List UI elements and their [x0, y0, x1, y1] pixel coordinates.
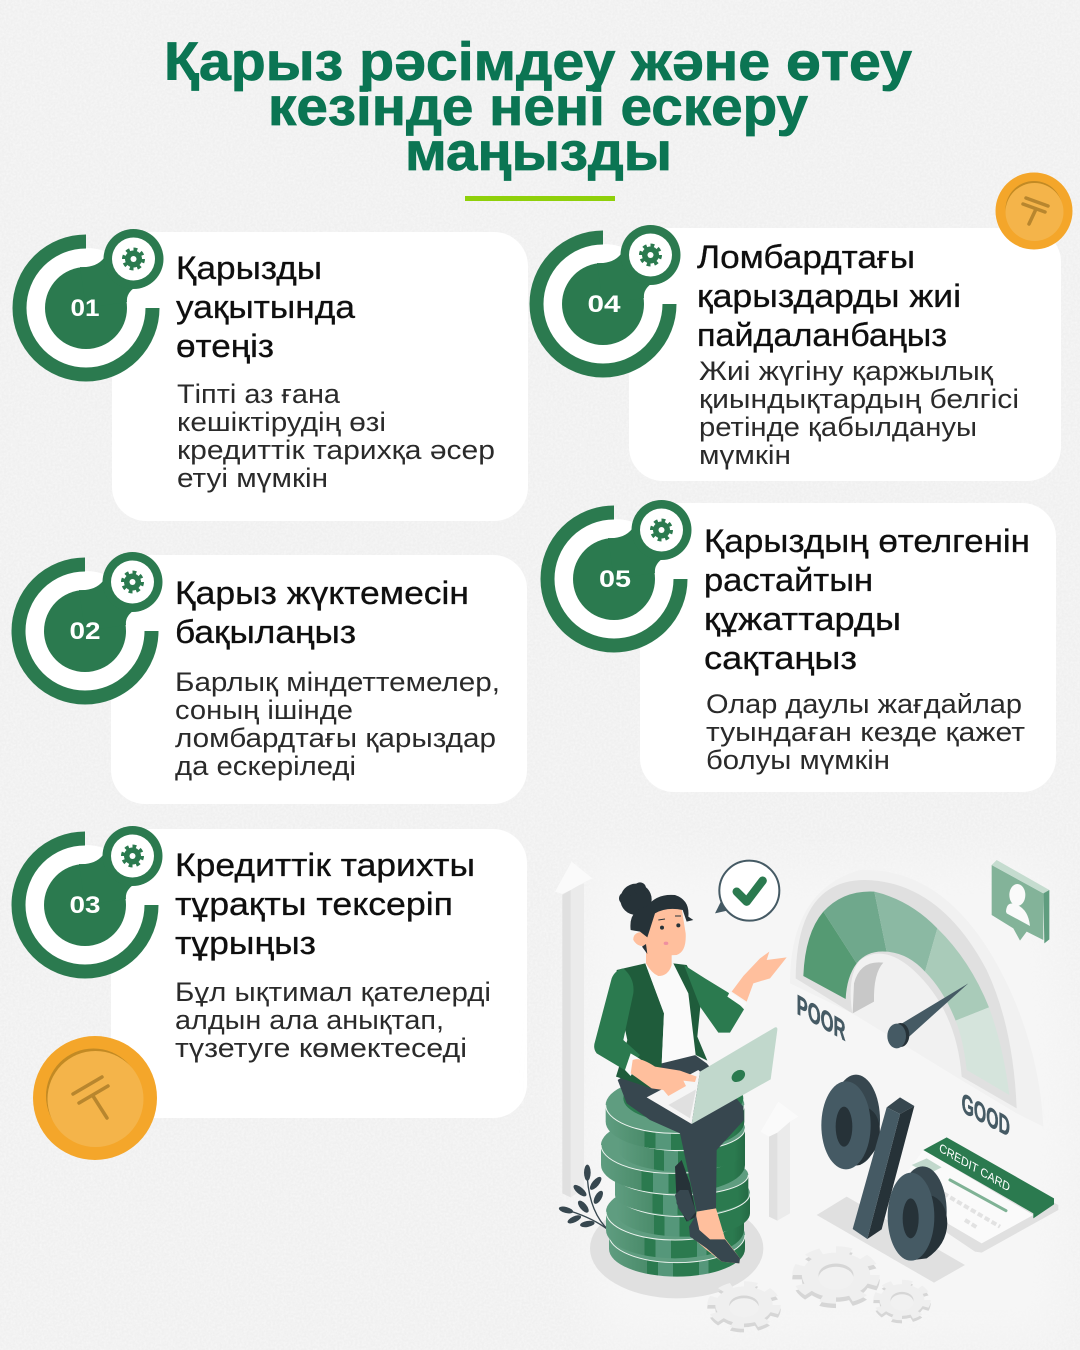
illustration: credit score gauge, percent, card: [790, 860, 1058, 1321]
heading 03: тұрақты тексеріп: [175, 886, 453, 922]
body 03: [175, 977, 491, 1063]
head: [633, 907, 686, 956]
gauge segments: [803, 892, 1009, 1095]
tall arrow: [555, 862, 592, 1197]
body 04: мүмкін: [699, 440, 791, 470]
gauge needle: [887, 983, 968, 1048]
ground shadow: [590, 1198, 763, 1298]
heading 04: Ломбардтағы: [697, 239, 915, 275]
laptop: [647, 1027, 777, 1124]
speech bubble with check: [715, 861, 779, 921]
lower back leg and shoe: [675, 1160, 697, 1222]
icon: tenge coin bottom left: [33, 1036, 157, 1160]
badge 01: [20, 229, 164, 374]
heading 02: [175, 575, 469, 650]
badge 03: [18, 826, 162, 972]
badge 03: 03: [70, 892, 100, 919]
body 02: да ескеріледі: [175, 751, 356, 781]
heading 04: пайдаланбаңыз: [697, 317, 947, 353]
gauge inner shade: [853, 962, 883, 1013]
heading 04: [697, 239, 961, 353]
heading 05: сақтаңыз: [704, 640, 857, 676]
title: [164, 32, 912, 182]
gears: [798, 1250, 927, 1321]
heading 05: [704, 523, 1030, 676]
left cuff: [625, 1053, 641, 1076]
heading 01: уақытында: [176, 289, 355, 325]
neck: [646, 945, 672, 976]
right lapel: [673, 963, 707, 1061]
body 02: ломбардтағы қарыздар: [175, 723, 496, 753]
body 02: [175, 667, 500, 781]
short arrow: [761, 1102, 798, 1221]
badge 02: [18, 552, 162, 698]
badge 04: 04: [588, 291, 621, 318]
title: кезінде нені ескеру: [268, 77, 808, 137]
blazer back: [616, 963, 664, 1088]
heading 03: тұрыңыз: [175, 925, 316, 961]
body 05: Олар даулы жағдайлар: [706, 689, 1022, 719]
credit card: CREDIT CARD: [938, 1140, 1011, 1195]
body 05: туындаған кезде қажет: [706, 717, 1025, 747]
body 01: кредиттік тарихқа әсер: [177, 435, 495, 465]
face features: [658, 916, 681, 945]
heading 04: қарыздарды жиі: [697, 278, 961, 314]
heading 02: Қарыз жүктемесін: [175, 575, 469, 611]
raised sleeve: [684, 965, 744, 1033]
trousers: [618, 1055, 744, 1212]
body 04: ретінде қабылдануы: [699, 412, 977, 442]
gear: [712, 1284, 776, 1329]
body 03: Бұл ықтимал қателерді: [175, 977, 491, 1007]
icon: tenge coin top right: [996, 172, 1072, 250]
badge 05: [548, 500, 692, 646]
heading 05: растайтын: [704, 562, 873, 598]
left sleeve: [594, 968, 640, 1072]
body 02: соның ішінде: [175, 695, 353, 725]
plant: [558, 1165, 609, 1231]
panel 05: [548, 500, 1056, 792]
panel 03: [18, 826, 527, 1118]
body 03: түзетуге көмектеседі: [175, 1033, 467, 1063]
heading 02: бақылаңыз: [175, 614, 356, 650]
left hand: [631, 1059, 697, 1096]
credit card: [893, 1137, 1058, 1253]
POOR label: POOR: [797, 989, 846, 1048]
body 03: алдын ала анықтап,: [175, 1005, 444, 1035]
body 02: Барлық міндеттемелер,: [175, 667, 500, 697]
badge 01: 01: [70, 295, 100, 322]
raised cuff: [727, 992, 747, 1008]
heading 03: Кредиттік тарихты: [175, 847, 475, 883]
body 05: болуы мүмкін: [706, 745, 890, 775]
shirt: [645, 963, 696, 1063]
panel 01: [20, 229, 528, 521]
panel 02: [18, 552, 527, 804]
body 01: етуі мүмкін: [177, 463, 328, 493]
body 05: [706, 689, 1025, 775]
heading 05: Қарыздың өтелгенін: [704, 523, 1030, 559]
hair: [619, 882, 693, 954]
body 01: [177, 379, 495, 493]
GOOD label: GOOD: [962, 1087, 1010, 1143]
percent sign: [821, 1075, 947, 1261]
heading 01: Қарызды: [176, 250, 322, 286]
body 01: Тіпті аз ғана: [177, 379, 341, 409]
badge 02: 02: [70, 618, 100, 645]
illustration: backdrop: [570, 860, 1075, 1340]
badge 05: 05: [599, 566, 631, 593]
badge 04: [536, 225, 680, 370]
heading 01: [176, 250, 355, 364]
title: маңызды: [405, 122, 672, 182]
coin stack: [601, 1074, 750, 1277]
body 04: қиындықтардың белгісі: [699, 384, 1019, 414]
profile icon: [992, 860, 1049, 943]
heading 03: [175, 847, 475, 961]
heading 05: құжаттарды: [704, 601, 901, 637]
heading 01: өтеңіз: [176, 328, 274, 364]
body 01: кешіктірудің өзі: [177, 407, 386, 437]
gauge halo: [790, 870, 1043, 1127]
illustration: woman on coin stack: [555, 861, 798, 1329]
body 04: Жиі жүгіну қаржылық: [699, 356, 993, 386]
panel 04: [536, 225, 1061, 481]
raised arm and hand: [732, 952, 787, 1002]
title: Қарыз рәсімдеу және өтеу: [164, 32, 912, 92]
title underline: [465, 196, 615, 201]
front foot and shoe: [689, 1208, 740, 1263]
floor shadow: [817, 1197, 965, 1283]
gauge frame: [796, 880, 1017, 1108]
body 04: [699, 356, 1019, 470]
